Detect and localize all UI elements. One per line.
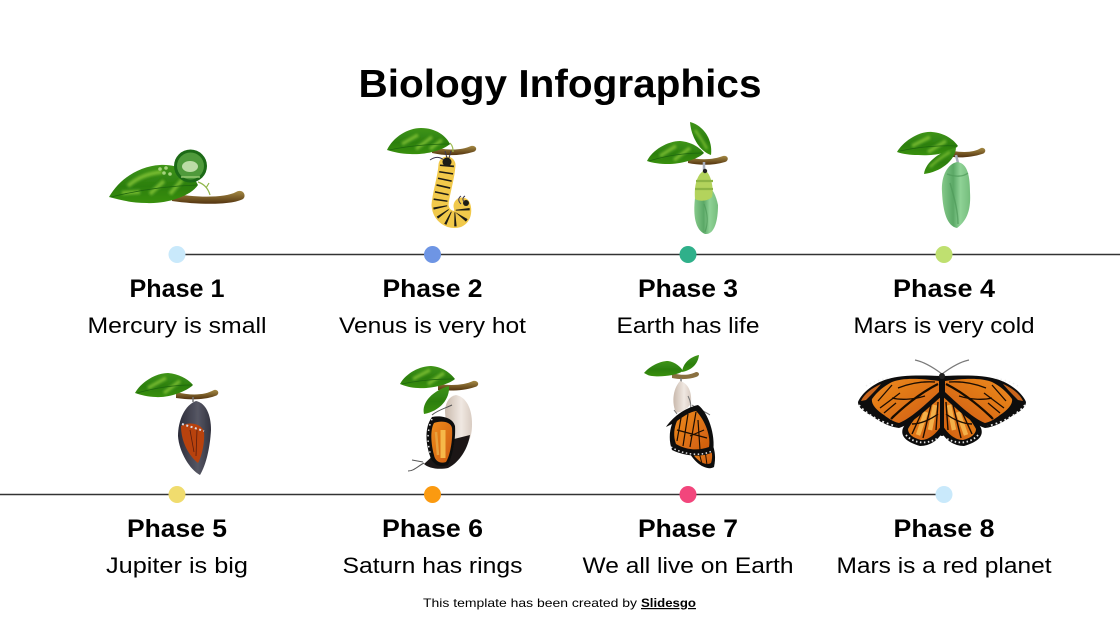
icon: phase 1 egg on leaf bbox=[109, 150, 245, 204]
footer credit bbox=[423, 596, 696, 610]
phase 5 label bbox=[106, 515, 248, 578]
phase 2 label: Phase 2 bbox=[382, 275, 482, 303]
phase 4 label: Mars is very cold bbox=[854, 313, 1034, 338]
phase 7 label: We all live on Earth bbox=[582, 553, 794, 578]
phase 6 label bbox=[342, 515, 522, 578]
phase 8 label: Mars is a red planet bbox=[836, 553, 1052, 578]
phase 1 label: Mercury is small bbox=[88, 313, 266, 338]
timeline: top row bbox=[168, 246, 1120, 263]
phase 4 label bbox=[854, 275, 1034, 338]
icon: phase 5 dark chrysalis bbox=[135, 373, 218, 475]
phase 3 label: Earth has life bbox=[616, 313, 760, 338]
phase 3 label bbox=[616, 275, 760, 338]
icon: phase 7 butterfly emerged bbox=[644, 355, 715, 468]
phase 7 label: Phase 7 bbox=[638, 515, 738, 543]
phase 1 label bbox=[88, 275, 266, 338]
phase 7 label bbox=[582, 515, 794, 578]
icon: phase 4 chrysalis bbox=[897, 132, 985, 228]
phase 5 label: Jupiter is big bbox=[106, 553, 248, 578]
timeline: bottom row bbox=[0, 486, 952, 503]
icon: phase 3 chrysalis bbox=[647, 122, 728, 234]
phase 3 label: Phase 3 bbox=[638, 275, 738, 303]
footer credit: This template has been created by bbox=[423, 596, 637, 610]
phase 5 label: Phase 5 bbox=[127, 515, 227, 543]
phase 2 label: Venus is very hot bbox=[339, 313, 526, 338]
phase 8 label bbox=[836, 515, 1052, 578]
phase 4 label: Phase 4 bbox=[893, 275, 995, 303]
footer credit: Slidesgo bbox=[641, 596, 696, 610]
phase 2 label bbox=[339, 275, 526, 338]
icon: phase 6 emerging butterfly bbox=[400, 366, 478, 471]
phase 6 label: Saturn has rings bbox=[342, 553, 522, 578]
title: Biology Infographics bbox=[358, 63, 762, 106]
phase 6 label: Phase 6 bbox=[382, 515, 483, 543]
icon: phase 2 caterpillar bbox=[387, 128, 476, 219]
phase 8 label: Phase 8 bbox=[894, 515, 995, 543]
phase 1 label: Phase 1 bbox=[130, 275, 225, 303]
icon: phase 8 monarch butterfly bbox=[858, 360, 1026, 446]
